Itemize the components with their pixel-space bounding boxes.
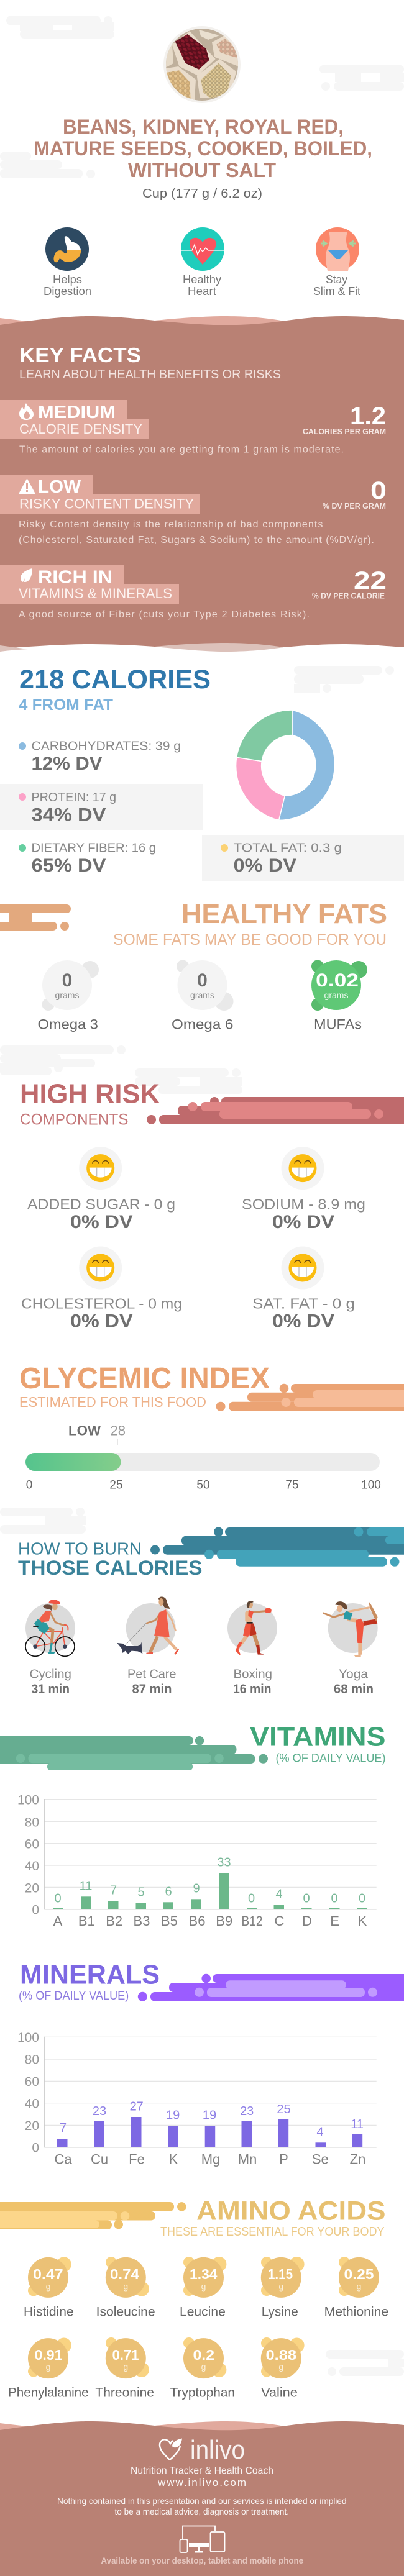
- risk: sodium: SODIUM - 8.9 mg: [242, 1196, 365, 1213]
- vitamins and minerals tag: VITAMINS & MINERALS: [19, 586, 172, 601]
- vitamins subheading: (% OF DAILY VALUE): [276, 1752, 385, 1765]
- footer url: www.inlivo.com: [157, 2477, 246, 2488]
- bar chart: minerals: Mg: [201, 2151, 220, 2167]
- bar chart: vitamins: 7: [110, 1883, 117, 1897]
- panel: footer: [0, 2421, 404, 2576]
- macro: total fat: 0% DV: [234, 855, 296, 876]
- bar chart: minerals: Ca: [54, 2151, 72, 2167]
- risk: added sugar: 0% DV: [70, 1212, 133, 1232]
- footer availability note: Available on your desktop, tablet and mobile phone: [101, 2556, 303, 2565]
- glycemic index gauge: 28: [111, 1422, 126, 1439]
- amino: tryptophan: g: [201, 2362, 206, 2372]
- amino: isoleucine: g: [123, 2281, 128, 2291]
- amino: lysine: 1.15: [268, 2266, 293, 2282]
- bar chart: vitamins: 40: [25, 1859, 39, 1873]
- amino: leucine: Leucine: [180, 2305, 226, 2319]
- activity: boxing: [227, 1601, 277, 1696]
- glycemic index gauge: LOW: [68, 1422, 101, 1439]
- glycemic index gauge: 100: [361, 1478, 381, 1492]
- title: [34, 116, 372, 181]
- risk: cholesterol: 0% DV: [70, 1311, 133, 1332]
- risky content description: Risky Content density is the relationship of bad components: [19, 519, 323, 530]
- burn calories heading: [18, 1539, 203, 1579]
- amino: methionine: Methionine: [324, 2305, 388, 2319]
- logo: inlivo heart and leaf: [160, 2435, 245, 2464]
- macro: carbohydrates: [19, 739, 181, 774]
- risky content tag: [0, 475, 200, 514]
- activity: pet care: Pet Care: [127, 1667, 177, 1681]
- macro: protein: PROTEIN: 17 g: [31, 791, 116, 804]
- glycemic index heading: GLYCEMIC INDEX: [19, 1362, 270, 1395]
- macro: total fat: [202, 835, 404, 881]
- amino: histidine: 0.47: [33, 2266, 63, 2282]
- bar chart: minerals: 40: [25, 2097, 39, 2111]
- amino: methionine: g: [357, 2281, 361, 2291]
- bar chart: minerals: Zn: [350, 2151, 365, 2167]
- benefit: healthy heart: Heart: [188, 285, 216, 298]
- bar chart: minerals: 23: [93, 2105, 106, 2118]
- risk: cholesterol: [21, 1246, 182, 1332]
- vitamins and minerals description: A good source of Fiber (cuts your Type 2 Diabetes Risk).: [19, 609, 310, 620]
- glycemic index gauge: [25, 1422, 381, 1492]
- calorie density value: CALORIES PER GRAM: [303, 427, 386, 436]
- vitamins and minerals tag: [0, 565, 179, 604]
- bar chart: vitamins: 6: [165, 1885, 172, 1899]
- amino: tryptophan: Tryptophan: [170, 2386, 235, 2400]
- macro: dietary fiber: DIETARY FIBER: 16 g: [31, 841, 156, 855]
- risk: sodium: 0% DV: [272, 1212, 334, 1232]
- activity: pet care: 87 min: [132, 1682, 172, 1696]
- amino acids subheading: THESE ARE ESSENTIAL FOR YOUR BODY: [160, 2225, 384, 2239]
- footer tagline: Nutrition Tracker & Health Coach: [131, 2465, 273, 2476]
- bar chart: vitamins: 4: [275, 1887, 283, 1901]
- burn calories heading: HOW TO BURN: [18, 1539, 142, 1558]
- glycemic index header decoration: [216, 1384, 404, 1411]
- risky content value: % DV PER GRAM: [323, 501, 386, 511]
- amino: isoleucine: [96, 2257, 155, 2319]
- from fat subheading: 4 FROM FAT: [19, 696, 113, 714]
- fat: omega 3: [37, 960, 99, 1032]
- activity: yoga: Yoga: [339, 1667, 369, 1681]
- risky content value: 0: [370, 477, 387, 504]
- bar chart: vitamins: 0: [54, 1892, 62, 1906]
- bar chart: vitamins: E: [330, 1913, 339, 1929]
- amino: valine: 0.88: [266, 2347, 296, 2363]
- vitamins header decoration: [0, 1736, 268, 1770]
- bar chart: vitamins: 33: [217, 1855, 231, 1869]
- calorie density tag: CALORIE DENSITY: [19, 421, 142, 437]
- bar chart: vitamins: 0: [303, 1892, 310, 1906]
- benefit: stay slim and fit: [313, 227, 360, 298]
- amino: threonine: g: [123, 2362, 128, 2372]
- title: WITHOUT SALT: [128, 159, 276, 181]
- benefit: helps digestion: [44, 227, 91, 298]
- bar chart: minerals: 100: [17, 2031, 39, 2045]
- macro: dietary fiber: [19, 841, 156, 876]
- bar chart: vitamins: B12: [241, 1913, 262, 1929]
- macro: total fat: TOTAL FAT: 0.3 g: [234, 841, 342, 855]
- risk: saturated fat: [252, 1246, 355, 1332]
- risk: cholesterol: CHOLESTEROL - 0 mg: [21, 1296, 182, 1312]
- minerals subheading: (% OF DAILY VALUE): [19, 1990, 129, 2003]
- bar chart: minerals: 0: [32, 2141, 39, 2155]
- risk: sodium: [242, 1147, 365, 1232]
- risky content description: (Cholesterol, Saturated Fat, Sugars & Sodium) to the amount (%DV/gr).: [19, 535, 374, 545]
- vitamins and minerals tag: RICH IN: [38, 568, 112, 588]
- vitamins and minerals value: 22: [354, 567, 387, 594]
- key facts subheading: LEARN ABOUT HEALTH BENEFITS OR RISKS: [19, 368, 281, 381]
- amino: methionine: 0.25: [344, 2266, 374, 2282]
- logo: inlivo heart and leaf: inlivo: [190, 2435, 245, 2464]
- bar chart: vitamins: 80: [25, 1815, 39, 1829]
- risky content tag: LOW: [38, 477, 81, 497]
- bar chart: vitamins: B9: [216, 1913, 232, 1929]
- amino: leucine: g: [201, 2281, 206, 2291]
- macro: dietary fiber: 65% DV: [31, 855, 106, 876]
- amino acids heading: AMINO ACIDS: [196, 2196, 385, 2226]
- bar chart: vitamins: 0: [32, 1903, 39, 1918]
- fat: omega 6: Omega 6: [172, 1016, 234, 1032]
- bar chart: minerals: 4: [316, 2125, 324, 2139]
- fat: mufas: 0.02: [316, 970, 359, 991]
- benefit: helps digestion: Helps: [53, 273, 82, 286]
- amino: valine: [261, 2337, 305, 2400]
- bar chart: vitamins: 0: [248, 1892, 255, 1906]
- glycemic index gauge: 25: [109, 1478, 123, 1492]
- fat: mufas: MUFAs: [314, 1016, 362, 1032]
- risky content tag: RISKY CONTENT DENSITY: [19, 496, 194, 512]
- fat: omega 3: Omega 3: [37, 1016, 98, 1032]
- title: MATURE SEEDS, COOKED, BOILED,: [34, 137, 372, 160]
- bar chart: vitamins: 5: [137, 1886, 145, 1900]
- amino: phenylalanine: Phenylalanine: [8, 2386, 89, 2400]
- calorie density tag: MEDIUM: [38, 403, 116, 422]
- bar chart: minerals: Cu: [91, 2151, 108, 2167]
- bar chart: minerals: 23: [240, 2105, 254, 2118]
- panel: key facts: [0, 316, 404, 652]
- bar chart: minerals: Mn: [238, 2151, 257, 2167]
- bar chart: vitamins: B3: [134, 1913, 150, 1929]
- bar chart: vitamins: 100: [17, 1793, 39, 1808]
- bar chart: minerals: 7: [60, 2121, 67, 2135]
- footer disclaimer: to be a medical advice, diagnosis or treatment.: [114, 2506, 289, 2516]
- bar chart: vitamins: B5: [161, 1913, 178, 1929]
- bar chart: minerals: Fe: [129, 2151, 145, 2167]
- minerals heading: MINERALS: [20, 1959, 160, 1990]
- amino: isoleucine: 0.74: [110, 2266, 139, 2282]
- bar chart: vitamins: K: [358, 1913, 367, 1929]
- bar chart: minerals: Se: [312, 2151, 329, 2167]
- bar chart: minerals: 19: [166, 2109, 180, 2123]
- amino: histidine: g: [46, 2281, 50, 2291]
- bar chart: vitamins: 20: [25, 1881, 39, 1895]
- risk: added sugar: ADDED SUGAR - 0 g: [27, 1196, 175, 1213]
- activity: cycling: Cycling: [30, 1667, 71, 1681]
- calorie density tag: [0, 400, 149, 439]
- bar chart: vitamins: A: [53, 1913, 63, 1929]
- amino: valine: g: [278, 2362, 283, 2372]
- amino: threonine: [95, 2337, 154, 2400]
- benefit: healthy heart: [181, 227, 224, 298]
- amino: isoleucine: Isoleucine: [96, 2305, 155, 2319]
- amino: tryptophan: [170, 2337, 235, 2400]
- bar chart: minerals: 60: [25, 2075, 39, 2089]
- burn calories heading: THOSE CALORIES: [18, 1557, 203, 1579]
- bar chart: minerals: P: [279, 2151, 288, 2167]
- amino: valine: Valine: [261, 2386, 298, 2400]
- macro: protein: 34% DV: [31, 805, 106, 825]
- bar chart: vitamins: B2: [106, 1913, 122, 1929]
- footer disclaimer: [57, 2496, 347, 2516]
- amino: lysine: [261, 2257, 305, 2319]
- activity: boxing: 16 min: [233, 1682, 271, 1696]
- amino: leucine: [180, 2257, 226, 2319]
- risky content description: [19, 519, 374, 545]
- amino: tryptophan: 0.2: [193, 2347, 214, 2363]
- fat: omega 3: grams: [55, 990, 79, 1000]
- risk: saturated fat: SAT. FAT - 0 g: [252, 1296, 355, 1312]
- benefit: stay slim and fit: Stay: [326, 273, 347, 286]
- risk: added sugar: [27, 1147, 175, 1232]
- amino: histidine: Histidine: [24, 2305, 74, 2319]
- bar chart: vitamins: C: [274, 1913, 284, 1929]
- amino: lysine: Lysine: [262, 2305, 298, 2319]
- glycemic index subheading: ESTIMATED FOR THIS FOOD: [19, 1394, 206, 1410]
- glycemic index gauge: 0: [26, 1478, 32, 1492]
- amino: threonine: 0.71: [112, 2347, 139, 2363]
- bar chart: minerals: 19: [203, 2109, 216, 2123]
- amino: threonine: Threonine: [95, 2386, 154, 2400]
- amino: phenylalanine: [8, 2338, 89, 2400]
- amino: histidine: [24, 2257, 74, 2319]
- bar chart: minerals: [17, 2031, 377, 2167]
- bar chart: minerals: 80: [25, 2053, 39, 2067]
- glycemic index gauge: 75: [285, 1478, 299, 1492]
- bar chart: vitamins: 0: [359, 1892, 365, 1906]
- healthy fats header decoration: [0, 904, 71, 931]
- healthy fats heading: HEALTHY FATS: [181, 899, 387, 929]
- bar chart: vitamins: B1: [78, 1913, 95, 1929]
- bar chart: minerals: 11: [351, 2118, 364, 2131]
- high risk subheading: COMPONENTS: [20, 1111, 128, 1128]
- vitamins heading: VITAMINS: [250, 1722, 385, 1752]
- activity: cycling: 31 min: [31, 1682, 70, 1696]
- fat: omega 6: 0: [197, 970, 208, 991]
- burn calories header decoration: [150, 1527, 404, 1567]
- bar chart: vitamins: [17, 1793, 377, 1929]
- amino: methionine: [324, 2257, 388, 2319]
- calorie density value: [303, 403, 386, 436]
- bar chart: vitamins: B6: [189, 1913, 205, 1929]
- macro: carbohydrates: CARBOHYDRATES: 39 g: [31, 739, 181, 753]
- activity: yoga: [323, 1601, 378, 1696]
- high risk heading: HIGH RISK: [20, 1079, 160, 1109]
- calorie density value: 1.2: [350, 403, 386, 430]
- activity: boxing: Boxing: [234, 1667, 272, 1681]
- title: BEANS, KIDNEY, ROYAL RED,: [63, 116, 344, 138]
- bar chart: minerals: K: [169, 2151, 178, 2167]
- fat: omega 6: [172, 960, 234, 1032]
- risky content value: [323, 477, 387, 511]
- benefit: stay slim and fit: Slim & Fit: [313, 285, 360, 298]
- footer disclaimer: Nothing contained in this presentation and our services is intended or implied: [57, 2496, 347, 2506]
- macro: protein: [0, 784, 203, 830]
- bar chart: vitamins: 11: [80, 1880, 92, 1893]
- high risk header decoration: [147, 1097, 404, 1124]
- food photo: sacks of beans: [163, 26, 241, 103]
- donut chart: macronutrients: [236, 710, 335, 820]
- fat: mufas: [311, 960, 367, 1032]
- healthy fats subheading: SOME FATS MAY BE GOOD FOR YOU: [113, 931, 387, 949]
- activity: yoga: 68 min: [334, 1682, 374, 1696]
- amino acids header decoration: [0, 2202, 186, 2229]
- bar chart: minerals: 25: [277, 2103, 291, 2116]
- bar chart: minerals: 20: [25, 2119, 39, 2133]
- minerals header decoration: [138, 1974, 404, 2001]
- macro: carbohydrates: 12% DV: [31, 753, 102, 774]
- amino: phenylalanine: 0.91: [35, 2347, 63, 2363]
- fat: omega 3: 0: [62, 970, 72, 991]
- bar chart: vitamins: 9: [193, 1882, 200, 1896]
- bar chart: minerals: 27: [130, 2100, 144, 2114]
- benefit: helps digestion: Digestion: [44, 285, 91, 298]
- activity: cycling: [25, 1600, 75, 1696]
- amino: lysine: g: [278, 2281, 283, 2291]
- key facts heading: KEY FACTS: [19, 344, 141, 366]
- amino: leucine: 1.34: [190, 2266, 218, 2282]
- risk: saturated fat: 0% DV: [272, 1311, 334, 1332]
- bar chart: vitamins: 0: [331, 1892, 338, 1906]
- vitamins and minerals value: % DV PER CALORIE: [312, 591, 385, 600]
- fat: omega 6: grams: [190, 990, 214, 1000]
- calorie density description: The amount of calories you are getting from 1 gram is moderate.: [19, 445, 344, 455]
- fat: mufas: grams: [324, 990, 348, 1000]
- bar chart: vitamins: D: [302, 1913, 312, 1929]
- serving size: Cup (177 g / 6.2 oz): [142, 187, 262, 201]
- glycemic index gauge: 50: [196, 1478, 210, 1492]
- calories heading: 218 CALORIES: [19, 665, 211, 694]
- amino: phenylalanine: g: [46, 2362, 50, 2372]
- vitamins and minerals value: [312, 567, 387, 600]
- bar chart: vitamins: 60: [25, 1837, 39, 1852]
- icon: devices: [180, 2526, 225, 2552]
- activity: pet care: [117, 1596, 179, 1696]
- benefit: healthy heart: Healthy: [183, 273, 221, 286]
